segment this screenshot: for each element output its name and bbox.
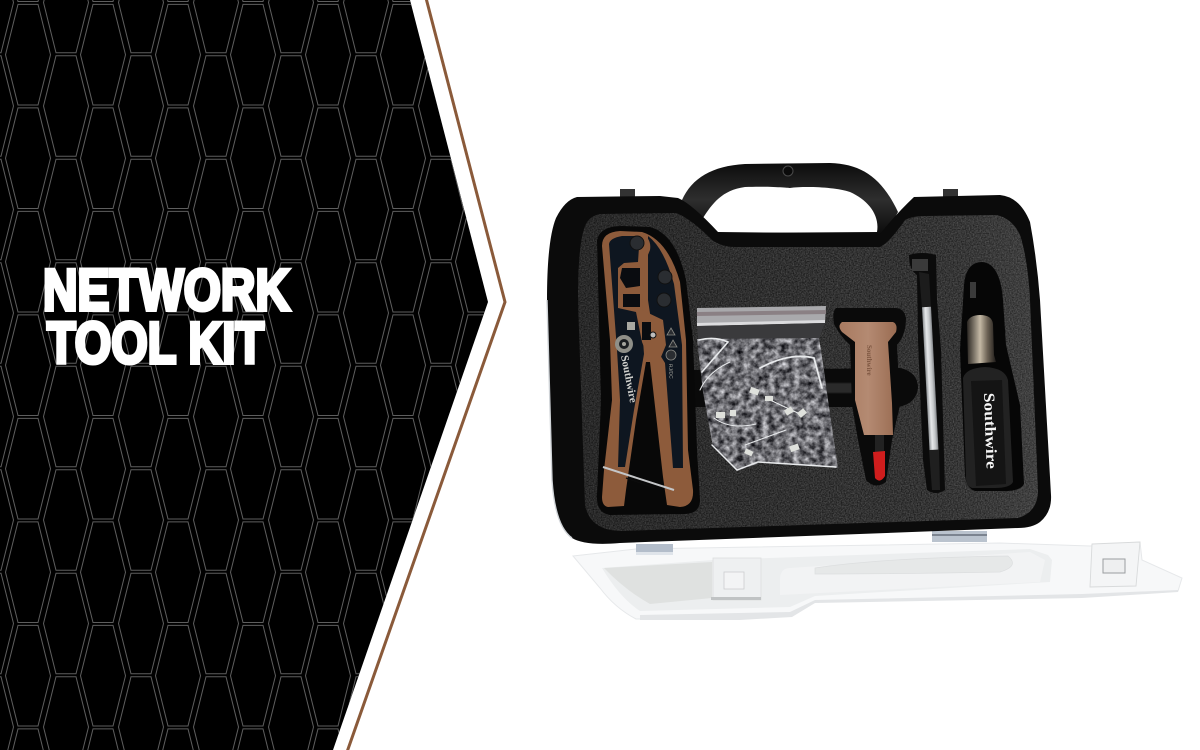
horizontal foam channel: [690, 368, 918, 407]
bag highlights: [699, 338, 836, 470]
clear plastic lid: [573, 542, 1182, 620]
screwdriver: [960, 262, 1024, 491]
punch body: [840, 322, 897, 435]
screwdriver handle: [963, 367, 1013, 488]
crimp die sockets: [620, 268, 651, 340]
bag of connectors: [697, 306, 838, 471]
title: Network Tool Kit: TOOL KIT: [47, 311, 264, 376]
carry case: [547, 163, 1051, 544]
cable punch tool: [833, 308, 906, 486]
screwdriver collar: [967, 315, 996, 364]
bag body: [697, 338, 838, 471]
bag zip strip: [697, 306, 826, 339]
screwdriver recess: [960, 262, 1024, 491]
lid latch tab right: [1090, 542, 1140, 587]
rod black end: [929, 450, 940, 490]
black chevron panel with hexagon pattern: [0, 0, 488, 750]
punch recess: [833, 308, 906, 486]
rj45 crimper: [597, 226, 700, 515]
rod black tip: [919, 272, 931, 308]
punch red tip: [873, 451, 885, 481]
screwdriver brand label: Southwire: [980, 393, 1000, 469]
crimper right plate: [648, 236, 683, 468]
lower lid rim: [640, 590, 1178, 620]
rod glass sleeve: [922, 307, 938, 450]
crimper model label: RJ/DC: [667, 364, 674, 379]
punch shaft: [875, 435, 884, 452]
case handle: [682, 163, 898, 236]
crimper steel pin: [603, 467, 674, 490]
crimper logo badge: [615, 322, 635, 353]
lid latch tab left: [711, 558, 761, 600]
screwdriver bit: [970, 282, 976, 298]
rod recess: [909, 253, 945, 493]
crimper warning icons: [666, 328, 677, 360]
rj45 connectors: [716, 387, 807, 456]
case shell: [547, 195, 1051, 544]
crimper head piece: [618, 232, 666, 357]
hinges: [636, 531, 987, 555]
foam insert: [578, 213, 1038, 531]
crimper brand label: Southwire: [618, 354, 639, 404]
crimper brown frame: [602, 231, 693, 507]
crimper pivot buttons: [630, 236, 672, 338]
crimper left plate: [609, 236, 644, 467]
punch label: Southwire: [865, 345, 873, 376]
driver bit rod: [909, 253, 945, 493]
latch nubs: [620, 189, 958, 198]
title: Network Tool Kit: [43, 258, 290, 376]
crimper recess: [597, 226, 700, 515]
brown chevron outline: [347, 0, 505, 750]
title: Network Tool Kit: NETWORK: [43, 258, 290, 323]
